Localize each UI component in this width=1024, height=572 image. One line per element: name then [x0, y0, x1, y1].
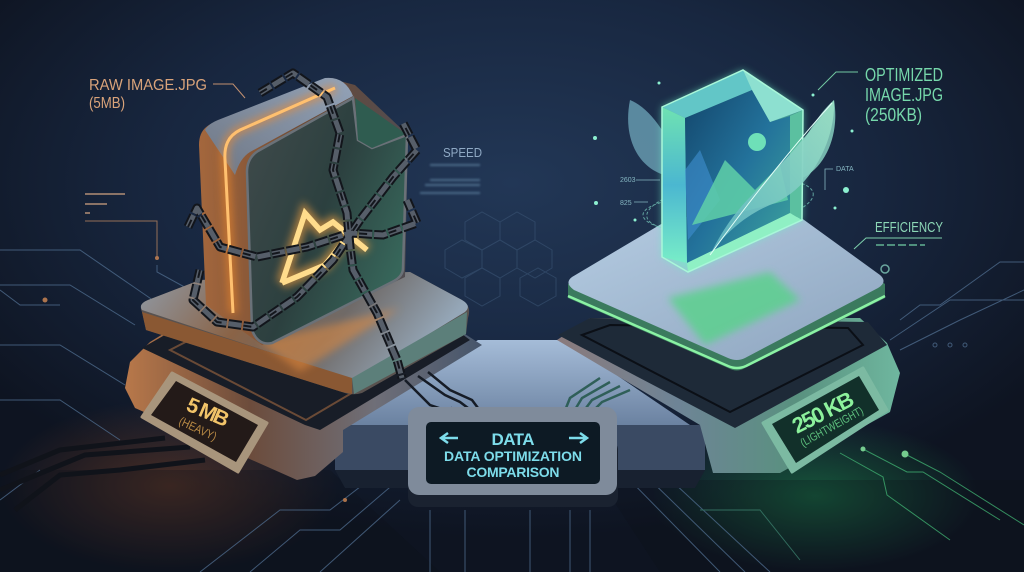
central connecting platform: [335, 340, 705, 488]
callout: small data labels: 2603: [620, 177, 636, 184]
callout: optimized image label: [818, 65, 943, 125]
right scale base: [557, 318, 900, 473]
chains: [188, 73, 417, 378]
callout: small data labels: 825: [620, 200, 632, 207]
badge: data optimization comparison: DATA OPTIMIZATION: [444, 448, 582, 464]
badge: data optimization comparison: [408, 407, 618, 507]
badge: 5 MB heavy: [142, 373, 267, 472]
feather: [710, 100, 834, 255]
icon: heavy file block: [199, 78, 408, 345]
badge: 5 MB heavy: (HEAVY): [177, 414, 219, 444]
badge: data optimization comparison: COMPARISON: [466, 464, 560, 480]
callout: optimized image label: IMAGE.JPG: [865, 85, 943, 105]
callout: raw image label: RAW IMAGE.JPG: [89, 77, 207, 94]
icon: feathers and data rings: [593, 82, 854, 240]
glowing mountain symbol: [282, 213, 367, 283]
badge: 250 KB lightweight: 250 KB: [788, 386, 858, 438]
callout: raw image label: (5MB): [89, 95, 125, 112]
right scale plate: [568, 217, 885, 370]
badge: 250 KB lightweight: [763, 368, 887, 472]
hexagon pattern: [445, 212, 556, 306]
callout: efficiency: EFFICIENCY: [875, 219, 943, 236]
arrows: [441, 433, 587, 443]
glowing edge on block: [225, 88, 335, 313]
callout: optimized image label: OPTIMIZED: [865, 65, 943, 85]
callout: optimized image label: (250KB): [865, 105, 922, 125]
left scale base: [125, 305, 482, 480]
icon: glass optimized file: [662, 70, 834, 272]
callout: small data labels: DATA: [836, 166, 854, 173]
circuit traces: [0, 194, 1024, 572]
connecting cables: [405, 372, 630, 410]
heavy cables: [0, 438, 205, 510]
chain loops outline: [188, 73, 417, 378]
callout: efficiency: [854, 219, 943, 249]
chain link holes: [188, 73, 417, 378]
left scale plate: [141, 272, 469, 394]
badge: 250 KB lightweight: (LIGHTWEIGHT): [799, 405, 866, 450]
chain loops highlight: [188, 73, 417, 378]
badge: data optimization comparison: DATA: [492, 430, 534, 449]
callout: small data labels: [620, 166, 854, 207]
callout: raw image label: [89, 77, 245, 112]
badge: 5 MB heavy: 5 MB: [183, 393, 233, 432]
callout: speed: [420, 145, 482, 193]
callout: speed: SPEED: [443, 145, 482, 160]
